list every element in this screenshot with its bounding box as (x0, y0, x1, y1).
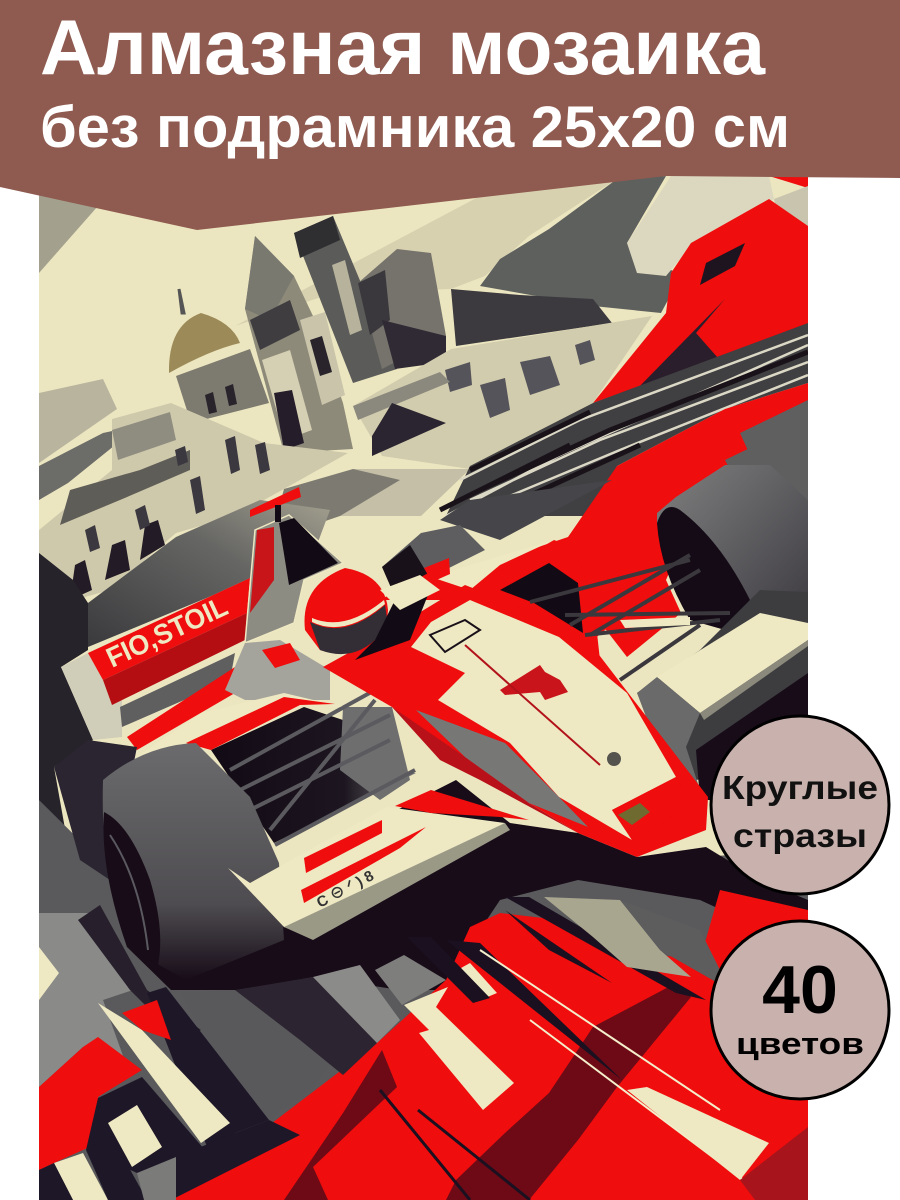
mirror (424, 558, 450, 582)
hills and sky bands (39, 176, 774, 500)
right front tyre (657, 465, 808, 630)
right suspension (530, 555, 730, 680)
cream T block (404, 987, 514, 1110)
race car: FIO,STOIL (101, 590, 232, 673)
race car: C ⊖ ᐟ ) 8 (314, 867, 377, 912)
helmet (304, 568, 388, 653)
sidepod black pit with struts (211, 707, 416, 843)
right tower (358, 249, 446, 369)
badge: 40 colours (711, 921, 889, 1099)
right red band (440, 383, 808, 640)
badge: round rhinestones (711, 716, 889, 894)
airbox (245, 515, 343, 643)
cockpit black (355, 596, 428, 660)
header banner (0, 0, 900, 230)
speed streak band (440, 323, 808, 516)
dome (179, 289, 184, 313)
lower road base (39, 800, 808, 1200)
rear left tyre (54, 740, 137, 880)
black ground shadow (127, 780, 808, 990)
badge: round rhinestones: Круглые (722, 769, 878, 806)
palace (39, 403, 348, 610)
badge: 40 colours: 40 (762, 952, 838, 1028)
far rear tyre (382, 525, 485, 573)
red road surface (171, 890, 808, 1200)
subtitle: без подрамника 25х20 см (40, 95, 790, 160)
sidepod arc (256, 693, 342, 707)
rear wing top (250, 487, 301, 517)
fort wall (353, 316, 652, 469)
track grey road (88, 500, 330, 647)
trees (451, 289, 612, 346)
badge: 40 colours: цветов (736, 1026, 864, 1061)
rear wing (61, 578, 250, 740)
engine side (225, 640, 330, 700)
church (245, 236, 353, 453)
red behind right suspension (606, 580, 680, 657)
upper red shapes (593, 176, 808, 403)
race car (54, 487, 730, 980)
front left tyre (103, 743, 284, 980)
badge: round rhinestones: стразы (733, 817, 867, 854)
nose logo marks (500, 665, 568, 700)
tall tower (294, 216, 397, 383)
left dark column (39, 553, 93, 826)
lower left abstract blocks (39, 905, 400, 1200)
nose cone (323, 585, 708, 857)
front wing (228, 807, 505, 937)
city buildings (39, 216, 652, 610)
cockpit surrounds (380, 540, 600, 660)
sky background (39, 176, 808, 867)
title: Алмазная мозаика (40, 3, 766, 91)
poster artwork: racing car (39, 176, 808, 1200)
right front wing (637, 590, 808, 800)
river road (340, 469, 468, 516)
